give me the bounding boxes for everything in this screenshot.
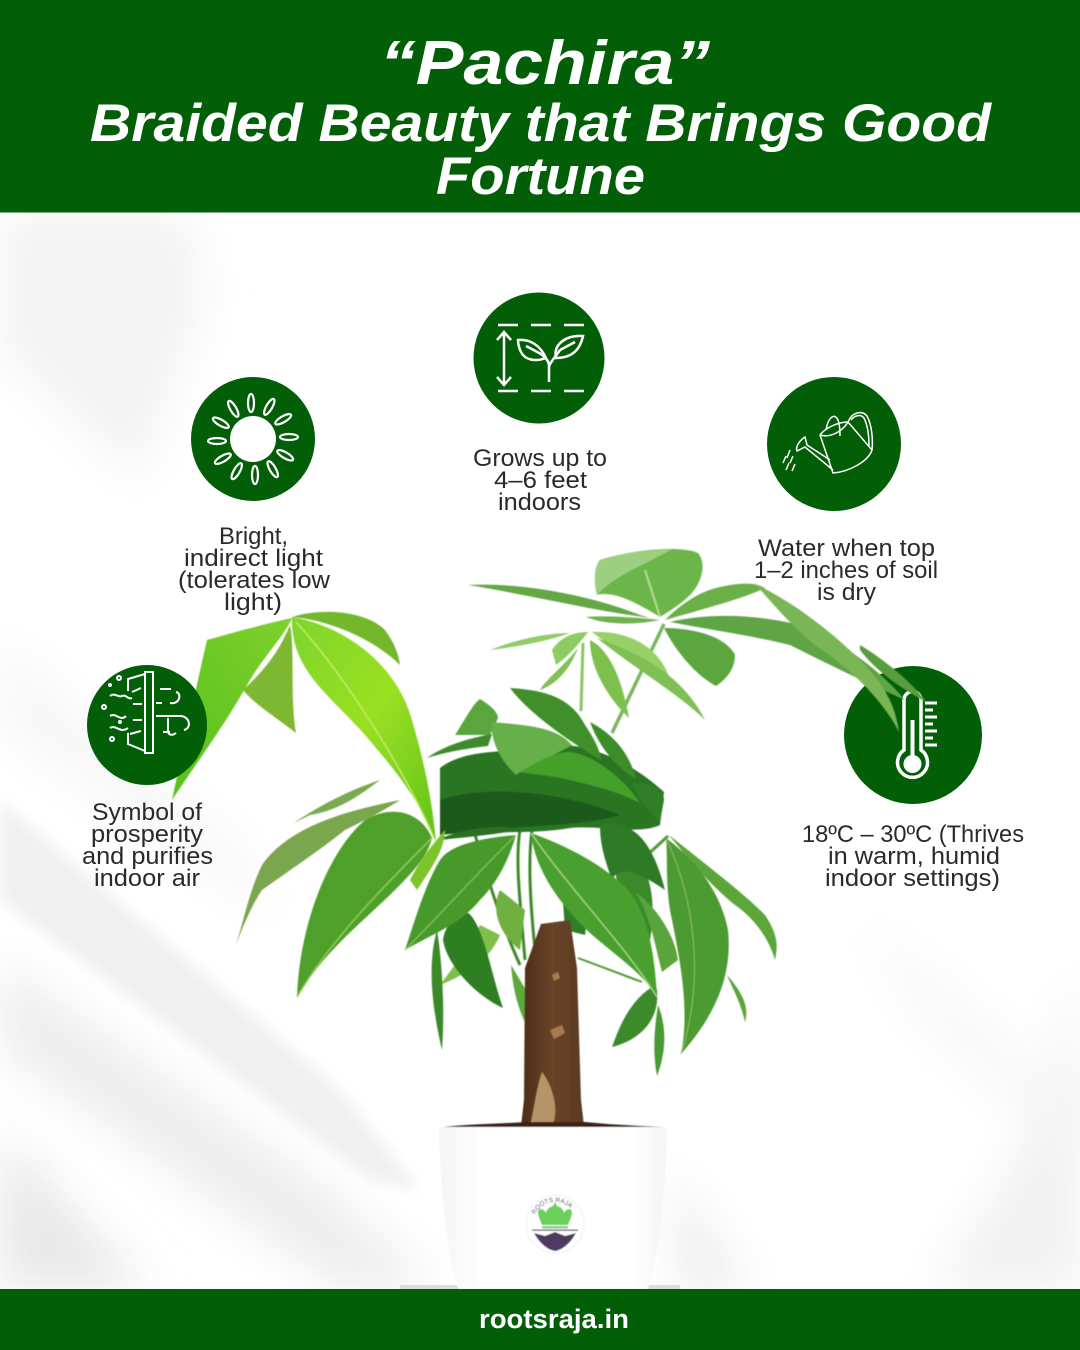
soil xyxy=(443,1122,665,1127)
text: watering xyxy=(754,535,938,606)
footer banner xyxy=(0,1289,1080,1350)
text: watering: 1–2 inches of soil xyxy=(754,557,938,584)
icon: watering can xyxy=(767,377,901,511)
lower leaves xyxy=(236,800,400,945)
icon: thermometer circle xyxy=(844,666,982,804)
text: watering: is dry xyxy=(817,579,876,606)
bright top-left leaves xyxy=(292,612,400,665)
text: light: light) xyxy=(224,589,282,616)
background with soft light rays xyxy=(0,212,1080,1290)
text: watering: Water when top xyxy=(758,535,935,562)
header banner xyxy=(0,0,1080,212)
text: plant height: indoors xyxy=(498,489,581,516)
text: light: Bright, xyxy=(219,523,288,550)
text: light: indirect light xyxy=(184,545,323,572)
icon: air purifier xyxy=(87,665,207,785)
light upper sprig xyxy=(490,633,570,650)
text: symbolism and air: Symbol of xyxy=(92,799,202,826)
trunk xyxy=(521,920,584,1126)
icon: plant height xyxy=(474,292,604,424)
text: symbolism and air: indoor air xyxy=(94,865,200,892)
icon: sun xyxy=(191,377,315,501)
text: symbolism and air: prosperity xyxy=(91,821,203,848)
dark central foliage xyxy=(440,745,664,835)
text: symbolism and air: and purifies xyxy=(82,843,213,870)
pachira plant in pot xyxy=(172,548,926,1289)
text: light xyxy=(178,523,331,616)
text: temperature: in warm, humid xyxy=(828,843,1000,870)
text: light: (tolerates low xyxy=(178,567,331,594)
text: plant height xyxy=(473,445,607,516)
pot logo xyxy=(526,1194,584,1254)
top sprig leaves xyxy=(468,585,650,618)
right leaves xyxy=(636,893,678,972)
text: plant height: 4–6 feet xyxy=(494,467,587,494)
text: symbolism and air xyxy=(82,799,213,892)
website: rootsraja.in xyxy=(479,1304,629,1334)
title line: Fortune: Fortune xyxy=(436,147,645,206)
text: plant height: Grows up to xyxy=(473,445,607,472)
pot xyxy=(439,1127,667,1289)
text: temperature xyxy=(802,821,1024,892)
mid foliage xyxy=(455,699,498,735)
pot logo: ROOTS RAJA xyxy=(531,1196,572,1214)
title line: Braided Beauty: Braided Beauty that Brings Good xyxy=(90,94,993,153)
small inner leaves behind trunk xyxy=(496,890,525,950)
text: temperature: indoor settings) xyxy=(825,865,1000,892)
text: temperature: 18ºC – 30ºC (Thrives xyxy=(802,821,1024,848)
title line: Pachira: “Pachira” xyxy=(380,29,710,98)
stems xyxy=(462,624,668,982)
